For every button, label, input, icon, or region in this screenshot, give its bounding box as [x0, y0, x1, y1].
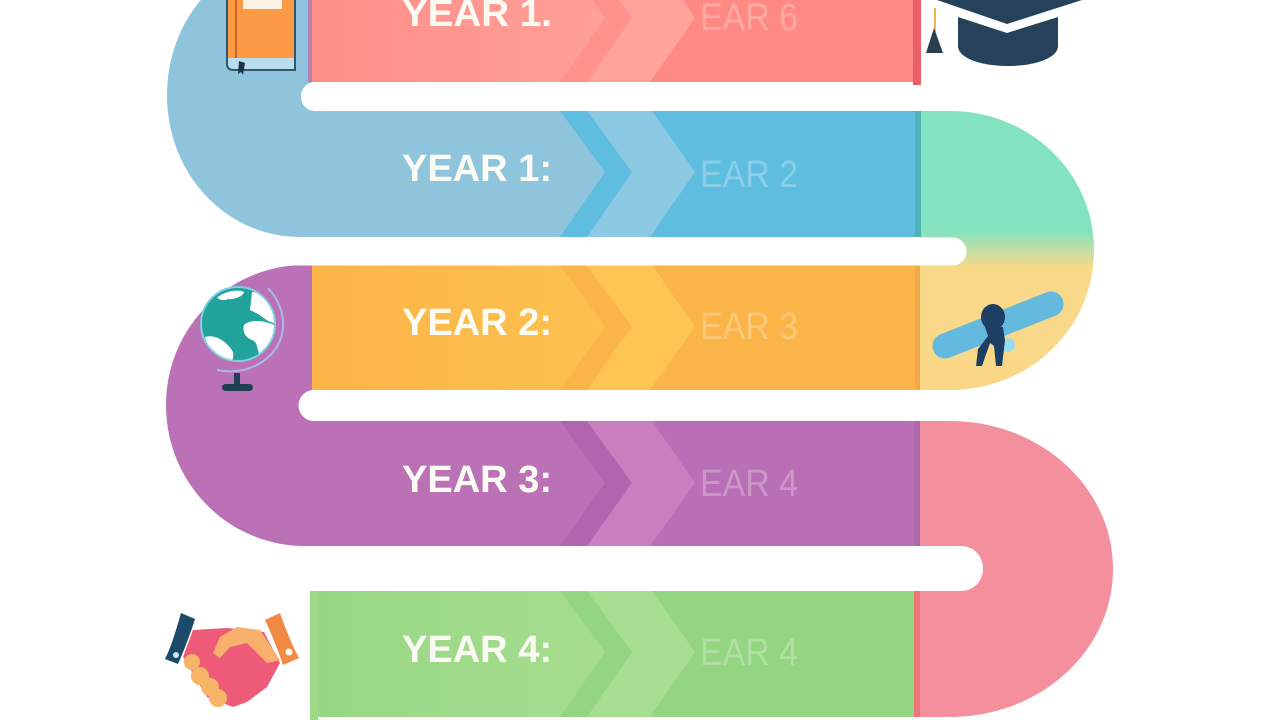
label: year 2 heading: YEAR 2: — [402, 302, 552, 344]
label: year 1 heading: YEAR 1: — [402, 148, 552, 190]
gap: white slot four — [280, 546, 983, 591]
icon: diploma figure — [945, 304, 1051, 366]
label: next year, green: EAR 4 — [700, 632, 798, 674]
gap: white slot three — [298, 390, 921, 421]
curve: pink right turn — [915, 421, 1113, 717]
label: year 3 heading: YEAR 3: — [402, 459, 552, 501]
band: year 1 blue — [300, 111, 921, 237]
label: next year, blue: EAR 2 — [700, 154, 798, 196]
band: year 3 purple — [300, 421, 920, 546]
curve: purple left turn — [166, 265, 500, 546]
icon: book — [227, 0, 295, 75]
band: year 4 green — [310, 587, 920, 720]
band: year 2 orange — [312, 265, 920, 390]
icon: graduation cap — [926, 0, 1082, 66]
icon: handshake — [165, 613, 299, 707]
band edge: salmon rim — [913, 0, 921, 85]
label: next year, orange: EAR 3 — [700, 306, 798, 348]
gap: white slot one — [301, 82, 1001, 111]
band: year 6 salmon — [308, 0, 920, 82]
label: next year, purple: EAR 4 — [700, 463, 798, 505]
roadmap infographic — [165, 0, 1113, 720]
gap: white slot two — [280, 238, 966, 265]
label: year 4 heading: YEAR 4: — [402, 629, 552, 671]
icon: globe — [201, 287, 283, 391]
curve: green and yellow right turn — [920, 111, 1094, 390]
curve: blue left turn — [167, 0, 500, 237]
